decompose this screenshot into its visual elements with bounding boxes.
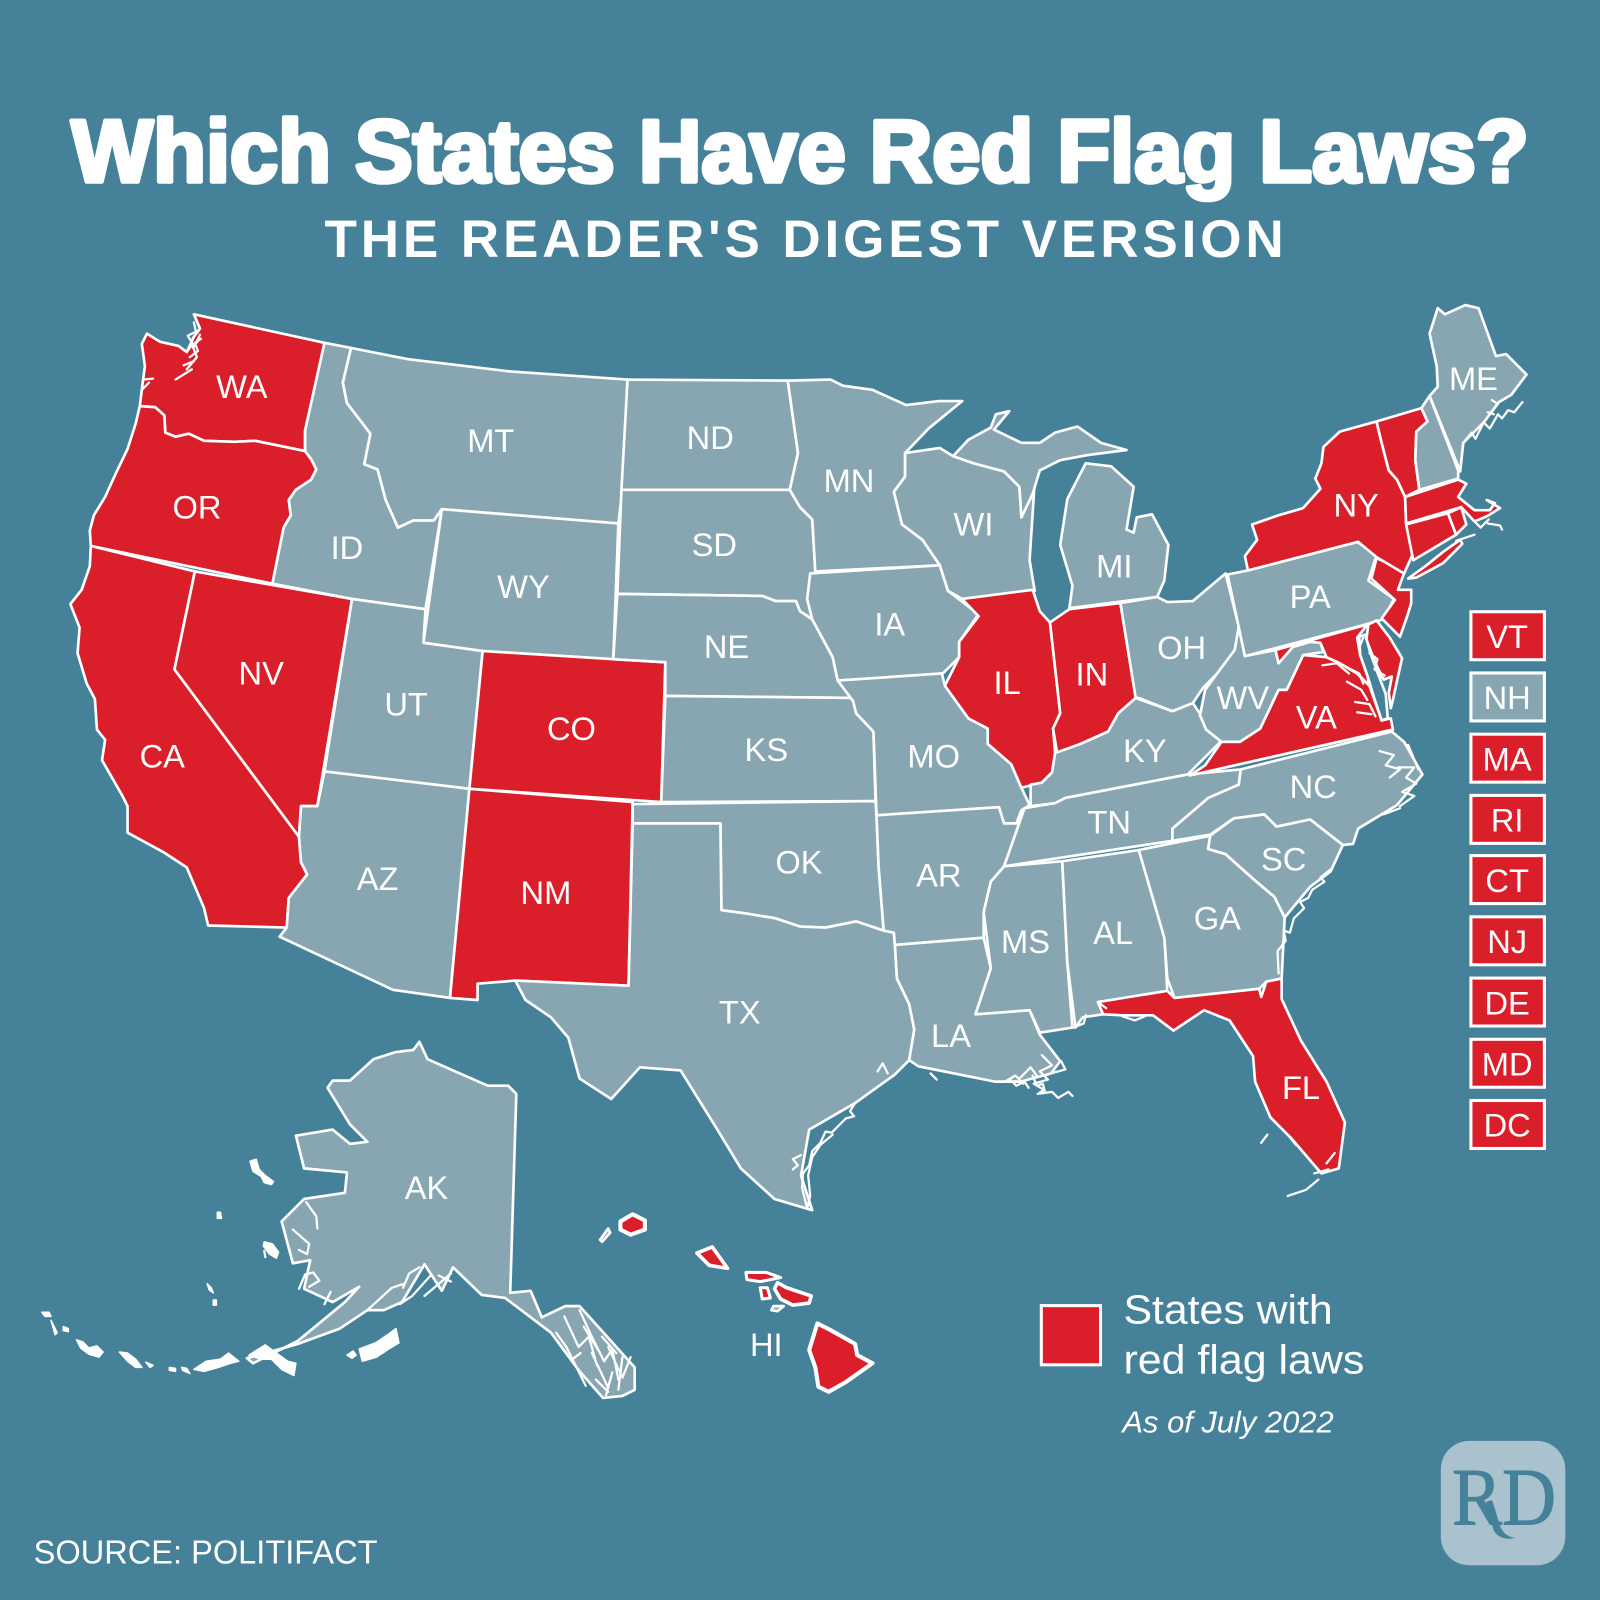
state labels: NV — [239, 655, 284, 692]
small-state key boxes: MD — [1482, 1046, 1533, 1083]
state: IL — [945, 590, 1060, 788]
small-state key boxes: DC — [1484, 1107, 1531, 1144]
state: OR — [90, 406, 316, 584]
small-state key boxes — [1471, 612, 1544, 1148]
state: MD — [1276, 624, 1369, 686]
state labels: NM — [521, 874, 571, 911]
state labels: LA — [931, 1017, 971, 1054]
state: AL — [1062, 850, 1167, 1028]
state labels: CA — [140, 737, 185, 774]
state labels: AL — [1093, 914, 1133, 951]
state labels: MT — [467, 422, 514, 459]
state: NY Long Island — [1408, 540, 1462, 579]
state: ND — [621, 380, 798, 490]
state labels: AZ — [357, 860, 398, 897]
state: SC — [1208, 814, 1343, 917]
state labels: FL — [1282, 1069, 1320, 1106]
state: DE and Delmarva shore — [1366, 620, 1402, 708]
state labels: IL — [994, 664, 1021, 701]
state: NV — [174, 571, 352, 837]
state labels: AR — [916, 857, 961, 894]
state: VT — [1377, 408, 1428, 497]
state labels: VA — [1296, 699, 1337, 736]
Alaska islands and panhandle — [42, 1159, 631, 1395]
state: ID — [272, 343, 442, 609]
state: PA — [1228, 542, 1394, 656]
source: SOURCE: POLITIFACT — [34, 1534, 378, 1571]
state labels: ID — [331, 529, 363, 566]
state: FL — [1098, 979, 1345, 1173]
logo: RD — [1441, 1441, 1565, 1565]
state labels: WY — [497, 568, 550, 605]
state: NC — [1172, 732, 1422, 845]
state: VA — [1190, 655, 1393, 776]
state: CO — [469, 651, 665, 802]
state labels: TN — [1087, 804, 1131, 841]
small-state key boxes: VT — [1486, 618, 1528, 655]
state: RI — [1448, 507, 1466, 535]
small-state key boxes: NH — [1484, 679, 1531, 716]
small-state key boxes: CT — [1485, 862, 1529, 899]
map: United States — [70, 305, 1527, 1398]
state: WA — [140, 314, 324, 451]
coastline details — [143, 322, 1522, 1208]
state: IN — [1050, 603, 1136, 753]
state labels: MO — [907, 737, 960, 774]
legend — [1041, 1286, 1364, 1440]
state: NJ — [1371, 558, 1411, 637]
state labels: PA — [1290, 578, 1331, 615]
state: UT — [324, 599, 483, 789]
state: MA — [1405, 480, 1500, 523]
state: TN — [1004, 769, 1241, 866]
state labels: SD — [692, 526, 737, 563]
state labels: OH — [1157, 629, 1206, 666]
state labels: TX — [719, 993, 761, 1030]
state labels: ND — [687, 419, 734, 456]
state: MO — [838, 673, 1030, 823]
state: OH — [1120, 573, 1239, 711]
state labels: OR — [172, 488, 221, 525]
state labels: HI — [750, 1326, 783, 1363]
state labels: NC — [1290, 768, 1337, 805]
state: TX — [515, 823, 914, 1210]
state: CT — [1406, 513, 1456, 560]
state: MN — [788, 380, 962, 571]
state labels: NE — [704, 628, 749, 665]
state: AR — [877, 807, 1019, 945]
state: LA — [895, 938, 1060, 1082]
legend: As of July 2022 — [1120, 1406, 1334, 1440]
state labels: AK — [405, 1169, 449, 1206]
state labels: MI — [1096, 548, 1132, 585]
state labels: MS — [1001, 923, 1050, 960]
state: NM — [450, 789, 633, 1000]
small-state key boxes: NJ — [1487, 923, 1527, 960]
legend: red flag laws — [1123, 1336, 1364, 1382]
state: AK — [247, 1042, 635, 1398]
state: ME — [1430, 305, 1527, 471]
state labels: WA — [216, 368, 268, 405]
state: OK — [633, 801, 884, 931]
state labels: SC — [1261, 840, 1306, 877]
state: KY — [1031, 698, 1220, 806]
state: MS — [976, 861, 1072, 1033]
state labels: IA — [874, 606, 905, 643]
state labels: ME — [1449, 360, 1498, 397]
state labels — [140, 360, 1498, 1363]
legend: States with — [1123, 1286, 1333, 1332]
state: IA — [807, 565, 979, 681]
small-state key boxes: DE — [1484, 984, 1530, 1021]
state: CA — [70, 546, 307, 928]
small-state key boxes: MA — [1483, 740, 1532, 777]
state: WV — [1200, 627, 1323, 742]
state labels: KS — [745, 731, 788, 768]
state labels: WV — [1217, 679, 1269, 716]
subtitle: THE READER'S DIGEST VERSION — [324, 210, 1284, 269]
state: MI upper peninsula — [953, 411, 1127, 517]
state: NE — [613, 594, 856, 698]
state: NY — [1245, 421, 1413, 573]
state: HI — [600, 1214, 872, 1392]
state labels: UT — [384, 685, 428, 722]
state: MI lower peninsula — [1060, 463, 1168, 608]
state: SD — [617, 490, 815, 619]
state: KS — [661, 696, 876, 802]
state labels: NY — [1333, 486, 1379, 523]
logo: RD: RD — [1452, 1451, 1556, 1542]
state: NH — [1415, 396, 1458, 490]
small-state key boxes: RI — [1491, 802, 1523, 839]
state: WY — [423, 509, 618, 659]
state labels: CO — [547, 710, 596, 747]
state labels: IN — [1076, 656, 1108, 693]
state labels: GA — [1194, 900, 1241, 937]
state labels: OK — [775, 843, 823, 880]
state: WI — [894, 448, 1035, 599]
state labels: WI — [954, 506, 993, 543]
state: GA — [1139, 836, 1285, 998]
state: AZ — [280, 771, 469, 998]
Chesapeake Bay — [1359, 635, 1388, 720]
title: Which States Have Red Flag Laws? — [71, 103, 1529, 201]
state: MT — [343, 348, 628, 528]
state labels: MN — [824, 462, 874, 499]
state labels: KY — [1123, 732, 1167, 769]
